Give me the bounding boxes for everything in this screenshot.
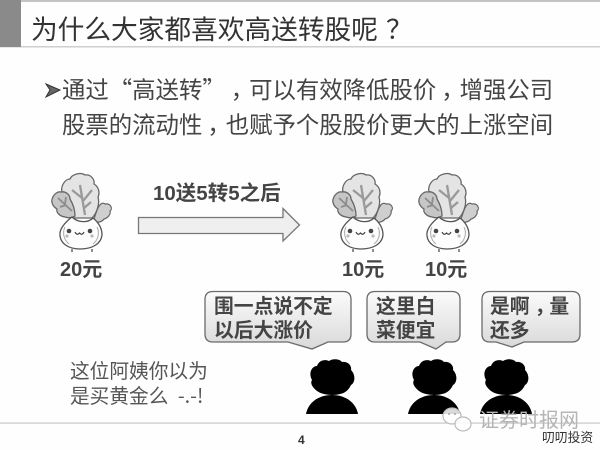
label: 10 yuan left: 10元 [342,259,384,281]
icon: cabbage 10 yuan left [333,174,392,252]
icon: wechat watermark [443,408,471,431]
speech bubble 1 [205,292,351,349]
person 1 [306,359,358,414]
watermark text: 证券时报网 [479,404,579,433]
icon: cabbage 20 yuan [52,174,111,252]
label: ratio: 10送5转5之后 [153,182,281,205]
arrow: after the split [138,208,300,241]
bubble text 1: 围一点说不定 [214,290,333,319]
title: 为什么大家都喜欢高送转股呢 ？ [31,8,413,47]
body text [62,71,553,140]
bubble text 2: 菜便宜 [376,314,435,342]
body text: 股票的流动性，也赋予个股股价更大的上涨空间 [62,106,553,140]
person 2 [408,359,460,414]
aside text: 是买黄金么 -.-! [70,380,203,409]
label: 20 yuan: 20元 [60,259,102,281]
speech bubble 2 [367,292,460,349]
aside text: 这位阿姨你以为 [70,355,208,384]
aside text [70,355,208,409]
person 3 [480,359,532,414]
icon: cabbage 10 yuan right [419,174,478,252]
bubble text 1 [214,290,333,342]
body text: 通过“高送转”，可以有效降低股价，增强公司 [62,71,553,105]
bubble text 3: 是啊 ，量 [490,290,569,319]
bubble text 3 [490,290,569,342]
account name: 叨叨投资 [542,427,593,446]
bubble text 3: 还多 [490,314,530,342]
label: 10 yuan right: 10元 [425,259,467,281]
page number: 4 [298,433,305,447]
speech bubble 3 [482,292,580,347]
bubble text 2 [376,290,435,342]
icon: bullet arrow [46,84,60,97]
bubble text 1: 以后大涨价 [214,314,313,342]
bubble text 2: 这里白 [376,290,435,319]
footer line [0,422,600,424]
title bar [0,0,600,48]
